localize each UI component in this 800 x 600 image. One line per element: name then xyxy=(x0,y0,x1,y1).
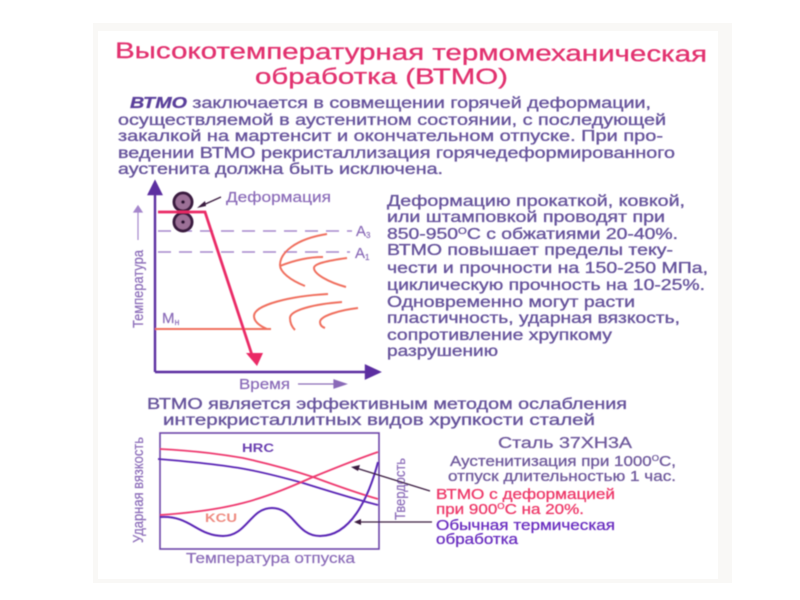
KCU curve, conventional xyxy=(160,462,378,536)
label Mн: М xyxy=(162,310,174,327)
deformation label with arrow: Деформация xyxy=(226,189,331,206)
leader arrow to conventional curve xyxy=(354,519,432,525)
right text block: С с обжатиями 20-40%. xyxy=(467,226,678,243)
deformation label with arrow xyxy=(197,189,331,208)
intro text block: осуществляемой в аустенитном состоянии, с последующей xyxy=(118,112,666,129)
CCT curves xyxy=(155,234,358,330)
chart: temperature-time diagram xyxy=(130,182,379,393)
label A1: А xyxy=(355,245,365,262)
right text block: сопротивление хрупкому xyxy=(387,327,612,344)
title xyxy=(115,38,707,89)
steel note: Аустенитизация при 1000 xyxy=(450,454,623,470)
right text block: циклическую прочность на 10-25%. xyxy=(387,277,705,294)
x axis label: Время xyxy=(239,376,290,393)
y axis label: Ударная вязкость xyxy=(130,437,147,543)
label A1: 1 xyxy=(365,253,370,262)
right text block: разрушению xyxy=(387,343,498,360)
y axis label: Температура xyxy=(130,249,147,328)
right text block: или штамповкой проводят при xyxy=(387,209,665,226)
steel note: Сталь 37ХН3А xyxy=(498,435,633,452)
legend: conventional treatment: Обычная термическая xyxy=(436,518,615,534)
y axis arrow xyxy=(149,182,161,372)
right axis label: Твердость xyxy=(392,458,409,520)
title: обработка (ВТМО) xyxy=(255,64,508,89)
middle heading text xyxy=(147,396,627,429)
steel note: отпуск длительностью 1 час. xyxy=(448,469,676,485)
legend: conventional treatment: обработка xyxy=(436,532,519,548)
legend: TMT: С на 20%. xyxy=(505,502,584,518)
HRC curve, conventional xyxy=(158,459,378,505)
intro text block: аустенита должна быть исключена. xyxy=(118,161,443,178)
slide card xyxy=(93,23,732,583)
right text block: чести и прочности на 150-250 МПа, xyxy=(387,260,708,277)
steel note: С, xyxy=(659,454,676,470)
middle heading text: ВТМО является эффективным методом ослабления xyxy=(147,396,627,413)
A3 and A1 dashed lines xyxy=(158,231,352,252)
label HRC: HRC xyxy=(242,441,274,455)
thermomechanical path arrow xyxy=(158,212,263,366)
legend: TMT: О xyxy=(497,502,505,511)
KCU curve, TMT xyxy=(160,452,378,515)
chart: properties vs tempering temperature xyxy=(130,433,409,567)
x axis label xyxy=(239,376,346,393)
HRC curve, TMT xyxy=(160,449,378,499)
middle heading text: интеркристаллитных видов хрупкости сталей xyxy=(163,412,595,429)
legend: TMT: при 900 xyxy=(436,502,488,518)
intro text block: закалкой на мартенсит и окончательном отпуске. При про- xyxy=(118,128,663,145)
right text block xyxy=(387,193,708,360)
title: Высокотемпературная термомеханическая xyxy=(115,38,707,67)
chart frame xyxy=(160,433,379,549)
label A3: А xyxy=(356,223,366,240)
legend: conventional treatment xyxy=(436,518,615,548)
right text block: пластичность, ударная вязкость, xyxy=(387,310,680,327)
x axis label: Температура отпуска xyxy=(186,550,356,567)
right text block: 850-950 xyxy=(387,226,444,243)
intro text block: ВТМО заключается в совмещении горячей деформации, xyxy=(130,95,651,112)
label KCU: KCU xyxy=(205,511,237,525)
intro text block: ведении ВТМО рекристаллизация горячедеформированного xyxy=(118,145,675,162)
steel note xyxy=(448,435,676,485)
right text block: Деформацию прокаткой, ковкой, xyxy=(387,193,685,210)
right text block: Одновременно могут расти xyxy=(387,294,635,311)
legend: TMT: ВТМО с деформацией xyxy=(436,487,615,503)
right text block: О xyxy=(458,226,467,236)
steel note: О xyxy=(652,454,659,463)
legend: TMT xyxy=(436,487,615,518)
intro text block xyxy=(118,95,675,178)
right text block: ВТМО повышает пределы теку- xyxy=(387,242,673,259)
label Mн: н xyxy=(174,317,180,327)
x axis arrow xyxy=(155,366,379,378)
leader arrow to TMT curve xyxy=(351,465,430,491)
rollers xyxy=(174,193,192,231)
label A3: 3 xyxy=(366,231,371,240)
